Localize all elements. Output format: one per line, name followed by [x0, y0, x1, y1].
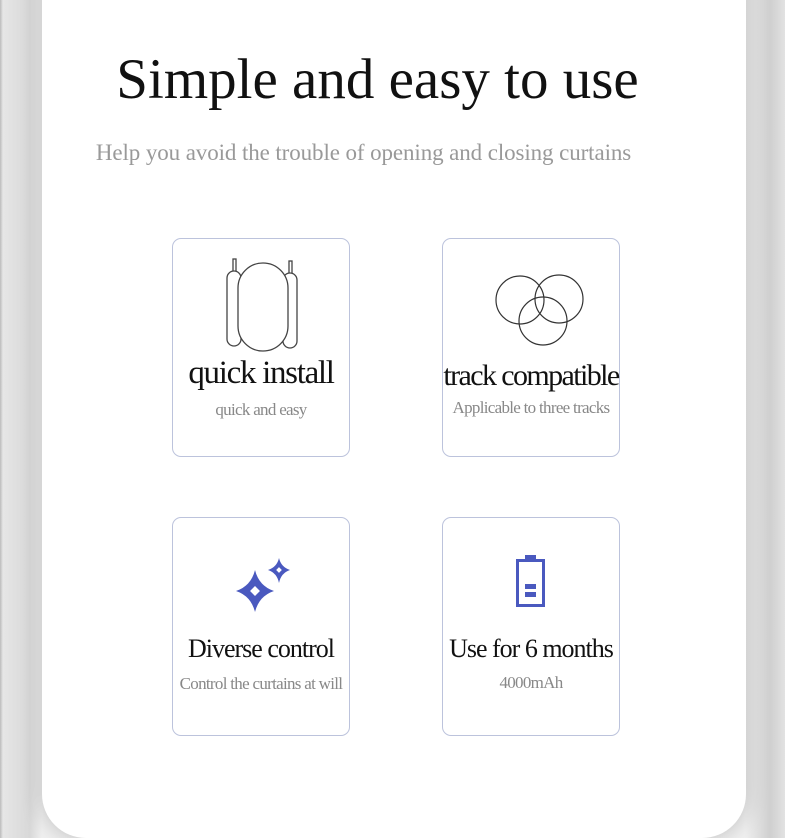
icon: curtain rings — [226, 258, 298, 352]
icon: battery — [516, 555, 545, 607]
text: control the curtains: Control the curtains at will — [180, 674, 342, 693]
text: diverse control: Diverse control — [188, 634, 334, 663]
text: 4000mAh: 4000mAh — [499, 673, 563, 692]
card: use for 6 months — [442, 517, 620, 736]
text: track compatible: track compatible — [443, 359, 619, 392]
subtitle: Help you avoid the trouble of opening and closing curtains — [96, 140, 631, 165]
text: applicable: Applicable to three tracks — [453, 398, 609, 417]
card: diverse control — [172, 517, 350, 736]
title: Simple and easy to use — [116, 48, 639, 111]
card: track compatible — [442, 238, 620, 457]
text: quick install: quick install — [188, 355, 334, 391]
icon: three circles — [495, 274, 584, 346]
text: quick and easy: quick and easy — [215, 400, 307, 419]
icon: sparkles — [236, 558, 290, 612]
text: use for 6 months: Use for 6 months — [449, 634, 613, 663]
card: quick install — [172, 238, 350, 457]
